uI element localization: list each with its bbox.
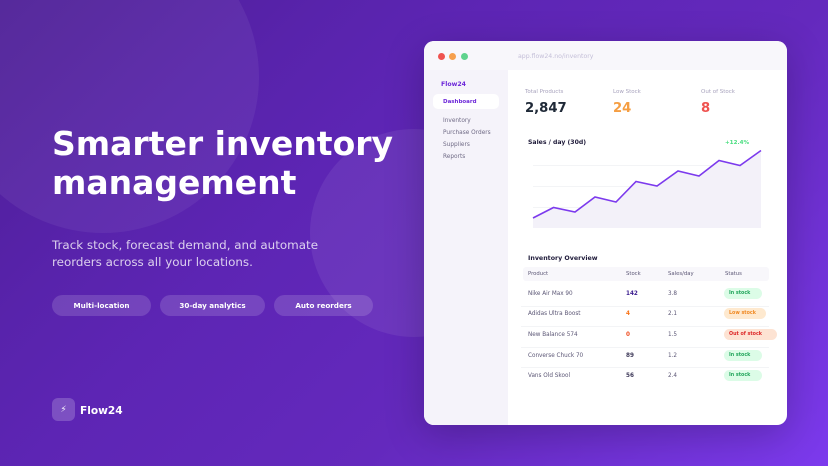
nav: suppliers: Suppliers: [443, 142, 470, 148]
active nav item: [433, 94, 499, 109]
row: Vans Old Skool: Vans Old Skool: [528, 373, 570, 379]
title: management: [52, 163, 296, 202]
icon: lightning bolt: ⚡: [60, 405, 67, 415]
table: inventory: 2.1: [668, 311, 677, 317]
table: inventory: [521, 271, 777, 381]
table: inventory: 1.5: [668, 332, 677, 338]
stat: total products: [525, 88, 567, 116]
pill: 30-day analytics: 30-day analytics: [179, 301, 246, 310]
icon: lightning bolt: [52, 398, 75, 421]
subtitle: [52, 238, 318, 269]
stat: low stock: Low Stock: [613, 88, 641, 94]
stat: out of stock: [701, 88, 735, 116]
stat: out of stock: 8: [701, 101, 710, 116]
table heading: Inventory Overview: [528, 255, 598, 262]
sidebar brand: Flow24: [441, 81, 466, 88]
chart delta: +12.4%: [725, 140, 749, 146]
table: inventory: Product: [528, 271, 548, 277]
brand logo: [52, 398, 123, 421]
url: app.flow24.no/inventory: [518, 53, 593, 60]
subtitle: reorders across all your locations.: [52, 255, 253, 269]
title bar: [424, 41, 787, 70]
nav: inventory: Inventory: [443, 118, 471, 124]
table: inventory: 0: [626, 332, 630, 338]
decorative circle: top left: [0, 0, 259, 233]
pill: 30-day analytics: [160, 295, 265, 316]
line chart: [532, 150, 762, 228]
table: inventory: 2.4: [668, 373, 677, 379]
table header: [522, 267, 769, 281]
pill: auto reorders: Auto reorders: [295, 301, 352, 310]
table: inventory: 3.8: [668, 290, 677, 296]
table: inventory: In stock: [729, 290, 750, 296]
table: inventory: Low stock: [729, 311, 756, 316]
pill: multi-location: [52, 295, 151, 316]
panel: sidebar: [424, 70, 508, 425]
row: Nike Air Max 90: Nike Air Max 90: [528, 290, 573, 296]
window controls: [438, 53, 468, 60]
chart heading: Sales / day (30d): [528, 139, 586, 146]
stat: total products: 2,847: [525, 101, 567, 116]
table: inventory: 4: [626, 311, 630, 317]
table: inventory: 142: [626, 290, 638, 296]
table: inventory: 56: [626, 373, 634, 379]
table: inventory: Stock: [626, 271, 641, 277]
decorative circle: center right: [310, 129, 518, 337]
table: inventory: In stock: [729, 352, 750, 358]
row: New Balance 574: New Balance 574: [528, 332, 578, 338]
brand name: Flow24: [80, 404, 123, 416]
subtitle: Track stock, forecast demand, and automate: [52, 238, 318, 252]
pill: auto reorders: [274, 295, 373, 316]
table: inventory: Status: [725, 271, 742, 277]
title: Smarter inventory: [52, 124, 393, 163]
pill: multi-location: Multi-location: [73, 301, 130, 310]
table: inventory: Out of stock: [729, 332, 762, 337]
row: Adidas Ultra Boost: Adidas Ultra Boost: [528, 311, 581, 317]
row: Converse Chuck 70: Converse Chuck 70: [528, 352, 583, 358]
active nav item: Dashboard: [443, 99, 477, 105]
stat: total products: Total Products: [525, 88, 563, 94]
stat: out of stock: Out of Stock: [701, 88, 735, 94]
table: inventory: 89: [626, 352, 634, 358]
panel: app window: [424, 41, 787, 425]
stat: low stock: 24: [613, 101, 631, 116]
title: [52, 124, 393, 202]
nav: purchase orders: Purchase Orders: [443, 130, 491, 136]
table: inventory: 1.2: [668, 352, 677, 358]
table: inventory: In stock: [729, 373, 750, 378]
stat: low stock: [613, 88, 641, 116]
nav: reports: Reports: [443, 154, 465, 160]
table: inventory: Sales/day: [668, 271, 694, 277]
